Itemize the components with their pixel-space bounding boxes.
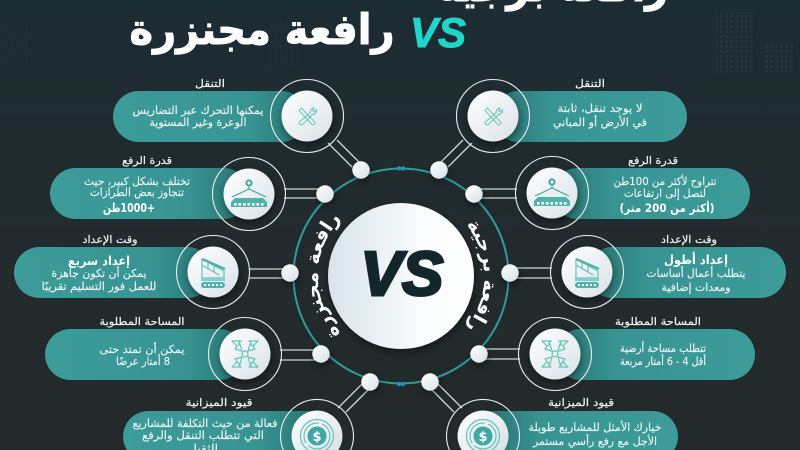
- body text: [84, 175, 190, 199]
- body text: [42, 266, 156, 293]
- body text: [132, 104, 264, 129]
- icon disc: [458, 410, 509, 450]
- heading: المساحة المطلوبة: [615, 316, 701, 328]
- body text: تتراوح لأكثر من 100طن: [614, 174, 716, 188]
- pill: [113, 91, 307, 142]
- ring: [208, 318, 282, 390]
- body text: يتطلب أعمال أساسات: [646, 266, 746, 280]
- panel: right required space: [518, 316, 755, 390]
- icon disc: [292, 410, 343, 450]
- icon disc: [224, 168, 274, 220]
- ring: [446, 399, 520, 450]
- body text: تختلف بشكل كبير، حيث: [84, 175, 190, 188]
- heading: وقت الإعداد: [82, 234, 138, 246]
- icon disc: [220, 328, 270, 380]
- ring: [270, 80, 344, 152]
- heading: قدرة الرفع: [628, 155, 678, 167]
- curved label: crawler crane: رافعة مجنزرة: [310, 216, 340, 338]
- panel: right mobility: [456, 78, 687, 152]
- pill: [587, 247, 786, 298]
- heading: التنقل: [195, 78, 225, 90]
- ring: [176, 236, 250, 308]
- title line: crawler crane: رافعة مجنزرة: [130, 5, 394, 55]
- body text: [132, 417, 278, 450]
- body text: 8 أمتار عرضًا: [116, 354, 170, 368]
- icon: expand arrows: [232, 341, 258, 367]
- panel: left lifting capacity: [50, 155, 286, 230]
- ring: [456, 80, 530, 152]
- badge disc: [328, 203, 474, 349]
- panel: left budget: [123, 397, 353, 450]
- body text: [646, 266, 746, 294]
- highlighted value: +1000طن: [103, 200, 155, 215]
- body text: ومعدات إضافية: [662, 281, 730, 294]
- title: [130, 0, 668, 56]
- icon disc: [282, 90, 332, 142]
- panel: left mobility: [113, 78, 344, 152]
- heading: المساحة المطلوبة: [100, 316, 184, 328]
- pill: [50, 168, 249, 219]
- pill: [14, 247, 213, 298]
- body text: في الأرض أو المباني: [553, 115, 647, 129]
- body text: فعالة من حيث التكلفة للمشاريع: [132, 417, 278, 430]
- icon: tools: [299, 108, 317, 125]
- icon disc: [526, 168, 578, 218]
- body text: [100, 342, 184, 368]
- body text: لا يوجد تنقل، ثابتة: [558, 102, 642, 115]
- icon: crawler crane: [575, 259, 599, 288]
- body text: يمكن أن تكون جاهزة: [52, 266, 146, 280]
- icon: hook and beam: [534, 179, 570, 206]
- ring: [516, 156, 588, 230]
- ring nodes: [281, 161, 519, 391]
- title VS: VS: [410, 9, 466, 56]
- body text: يمكن أن تمتد حتى: [100, 342, 184, 356]
- panel: right budget: [446, 397, 678, 450]
- heading: وقت الإعداد: [661, 234, 717, 246]
- central ring: [294, 168, 508, 384]
- icon: dollar coin: $: [312, 430, 322, 445]
- body text: أقل 4 - 6 أمتار مربعة: [620, 354, 706, 368]
- badge text: VS: [361, 240, 443, 309]
- panel: left setup time: [14, 234, 250, 308]
- body text: يمكنها التحرك عبر التضاريس: [132, 104, 264, 117]
- heading: قيود الميزانية: [186, 397, 252, 409]
- icon: tools: [485, 108, 503, 125]
- body text: [614, 174, 716, 200]
- pill: [123, 411, 317, 450]
- icon disc: [530, 328, 580, 380]
- pill: [45, 329, 245, 380]
- icon: expand arrows: [542, 341, 568, 367]
- icon disc: [188, 246, 238, 298]
- heading: قيود الميزانية: [548, 397, 614, 409]
- ring accent dots: [397, 166, 405, 386]
- icon: hook and beam: [231, 180, 267, 207]
- icon disc: [468, 90, 518, 142]
- ring: [518, 318, 592, 390]
- body text: [620, 341, 706, 368]
- ring: [212, 158, 286, 230]
- ring: [550, 236, 624, 308]
- highlighted text: إعداد سريع: [68, 253, 130, 268]
- icon: dollar coin: [300, 419, 334, 450]
- heading: قدرة الرفع: [122, 155, 172, 167]
- panel: right setup time: [550, 234, 786, 308]
- pill: [555, 329, 755, 380]
- curved label: tower crane: رافعة برجية: [466, 222, 494, 330]
- body text: خيارك الأمثل للمشاريع طويلة: [528, 420, 662, 434]
- body text: [528, 420, 662, 448]
- center VS badge: [328, 203, 474, 349]
- body text: تتجاوز بعض الطرازات: [90, 186, 184, 199]
- heading: التنقل: [575, 78, 605, 90]
- icon: dollar coin: $: [478, 430, 488, 445]
- body text: لتصل إلى ارتفاعات: [624, 187, 706, 200]
- pill: [493, 91, 687, 142]
- body text: [553, 102, 647, 129]
- panel: left required space: [45, 316, 282, 390]
- pill: [483, 411, 678, 450]
- icon: crawler crane: [201, 259, 225, 288]
- body text: التي تتطلب التنقل والرفع: [142, 429, 264, 442]
- body text: للعمل فور التسليم تقريبًا: [42, 280, 156, 293]
- icon disc: [562, 246, 612, 298]
- ring: [280, 399, 353, 450]
- connector lines: [249, 140, 552, 412]
- highlighted value: (أكثر من 200 متر): [620, 200, 714, 215]
- body text: الأجل مع رفع رأسي مستمر: [532, 434, 657, 448]
- body text: تتطلب مساحة أرضية: [620, 341, 706, 355]
- pill: [552, 168, 750, 219]
- icon: dollar coin: [466, 419, 500, 450]
- body text: الوعرة وغير المستوية: [150, 116, 246, 129]
- panel: right lifting capacity: [516, 155, 750, 230]
- highlighted text: إعداد أطول: [664, 251, 728, 267]
